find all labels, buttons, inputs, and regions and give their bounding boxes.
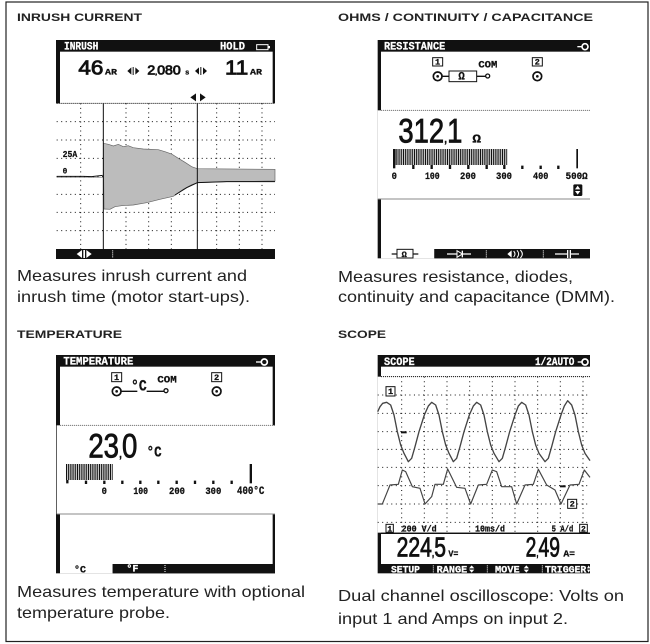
screen: inrush waveform display: HOLD <box>220 42 245 54</box>
bar graph: 200 <box>460 171 476 182</box>
screen: resistance display: 1 <box>435 58 440 68</box>
screen: inrush waveform display: s <box>185 69 189 77</box>
screen: temperature display: °C <box>147 446 162 462</box>
bar graph: 400°C <box>237 486 265 498</box>
description: ohms continuity capacitance: continuity and capacitance (DMM). <box>338 289 615 306</box>
status row: 1 <box>387 525 392 534</box>
panel: ohms continuity capacitance <box>338 12 615 306</box>
screen: resistance display: 2 <box>535 58 540 68</box>
screen: oscilloscope display <box>378 355 590 575</box>
description: temperature: temperature probe. <box>17 605 170 622</box>
heading: inrush current: INRUSH CURRENT <box>17 12 142 24</box>
status row <box>386 523 587 534</box>
status row: 10ms/d <box>475 523 505 534</box>
bar graph: 500Ω <box>566 171 588 182</box>
description: ohms continuity capacitance: Measures resistance, diodes, <box>338 269 573 286</box>
bar graph <box>66 464 265 498</box>
screen: oscilloscope display: 1 <box>388 387 393 397</box>
softkey bar: °F <box>126 564 138 575</box>
screen: temperature display: 2 <box>214 373 219 383</box>
screen: inrush waveform display: 46 <box>78 57 103 79</box>
panel: temperature <box>17 329 305 622</box>
description: inrush current: inrush time (motor start-ups). <box>17 289 250 306</box>
screen: inrush waveform display: 11 <box>225 57 248 79</box>
description: inrush current: Measures inrush current and <box>17 268 247 285</box>
screen: temperature display: 1 <box>114 373 119 383</box>
softkey bar <box>381 249 590 260</box>
screen: inrush waveform display: AR <box>105 68 117 77</box>
bar graph: 0 <box>392 171 397 182</box>
description: scope: Dual channel oscilloscope: Volts on <box>338 588 624 605</box>
screen: inrush waveform display: AR <box>250 68 262 77</box>
screen: inrush waveform display: 0 <box>63 167 67 177</box>
screen: temperature display: °C <box>131 378 147 396</box>
softkey bar: °C <box>74 565 86 576</box>
screen: oscilloscope display: 224,5 <box>397 532 446 563</box>
screen: inrush waveform display: 2,080 <box>147 63 181 77</box>
screen: oscilloscope display: V= <box>448 549 459 560</box>
softkey bar: Ω <box>402 250 407 260</box>
description: temperature: Measures temperature with optional <box>17 584 305 601</box>
softkey bar: MOVE <box>495 564 520 575</box>
screen: oscilloscope display: SCOPE <box>384 357 415 369</box>
softkey bar <box>391 564 590 575</box>
description: temperature <box>17 584 305 622</box>
screen: resistance display: COM <box>478 59 497 70</box>
bar graph: 0 <box>102 486 107 497</box>
screen: inrush waveform display <box>56 40 275 259</box>
screen: resistance display: 312,1 <box>398 112 462 150</box>
bar graph: 400 <box>533 171 548 182</box>
bar graph: 200 <box>169 486 185 497</box>
heading: scope: SCOPE <box>338 329 386 341</box>
description: scope <box>338 588 624 628</box>
screen: temperature display: 23,0 <box>88 427 137 465</box>
heading: ohms continuity capacitance: OHMS / CONTINUITY / CAPACITANCE <box>338 12 593 24</box>
screen: resistance display: RESISTANCE <box>384 42 445 54</box>
panel: scope <box>338 329 624 628</box>
screen: temperature display: COM <box>157 374 177 385</box>
screen: oscilloscope display: 1/2AUTO <box>535 357 575 369</box>
status row: 2 <box>581 525 586 534</box>
screen: oscilloscope display: 2,49 <box>526 532 560 563</box>
description: scope: input 1 and Amps on input 2. <box>338 611 568 628</box>
screen: inrush waveform display: INRUSH <box>64 42 98 54</box>
softkey bar: RANGE <box>437 564 467 575</box>
screen: oscilloscope display: A= <box>563 549 575 560</box>
softkey bar: TRIGGER <box>545 564 586 575</box>
screen: oscilloscope display: 2 <box>570 500 575 510</box>
screen: temperature display <box>56 355 275 576</box>
description: inrush current <box>17 268 250 306</box>
softkey bar <box>60 564 275 576</box>
screen: resistance display: Ω <box>472 132 481 146</box>
screen: temperature display: TEMPERATURE <box>63 357 133 369</box>
bar graph: 100 <box>425 171 440 182</box>
softkey bar: SETUP <box>391 564 420 575</box>
description: ohms continuity capacitance <box>338 269 615 306</box>
screen: resistance display <box>378 40 590 260</box>
bar graph: 100 <box>133 486 148 497</box>
bar graph: 300 <box>205 486 221 497</box>
status row: 5 A/d <box>552 523 573 534</box>
status row: 200 V/d <box>402 523 437 534</box>
screen: resistance display: Ω <box>458 72 465 84</box>
waveform <box>103 143 275 209</box>
channel 2 waveform <box>378 469 590 504</box>
panel: inrush current <box>17 12 275 306</box>
screen: inrush waveform display: 25A <box>63 149 78 160</box>
bar graph: 300 <box>496 171 512 182</box>
channel 1 waveform <box>378 401 590 462</box>
heading: temperature: TEMPERATURE <box>17 329 122 341</box>
bar graph <box>392 149 588 182</box>
